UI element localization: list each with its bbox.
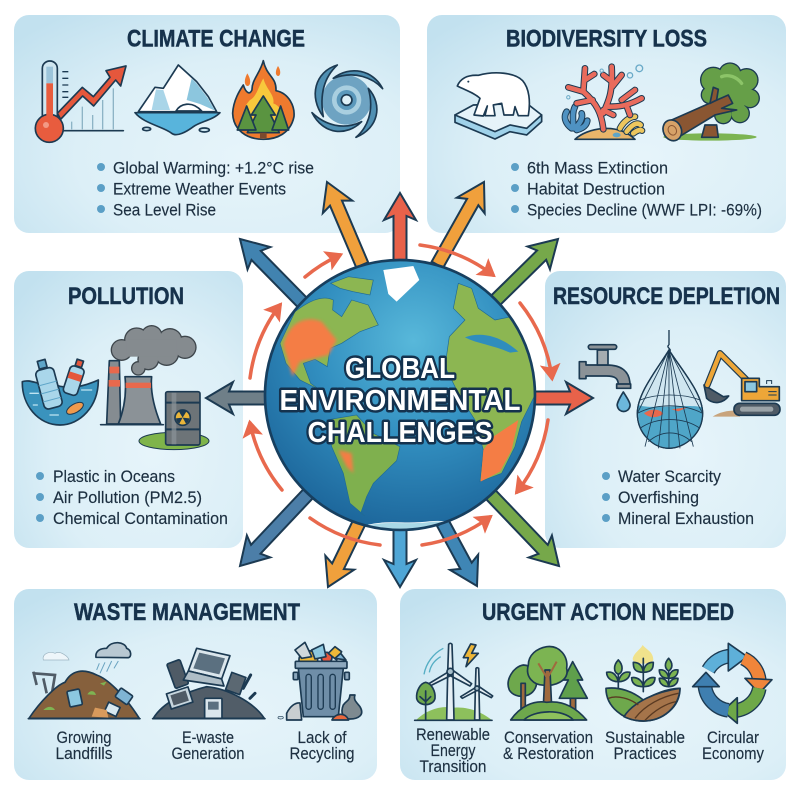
bullet list: pollution: Chemical Contamination (53, 509, 228, 528)
label: conservation and restoration: Conservation (504, 728, 593, 747)
label: sustainable practices: Sustainable (605, 728, 685, 747)
landmass: greenland (383, 266, 419, 302)
icon: overflowing trash can (278, 642, 362, 720)
landmass: arctic islands (331, 277, 373, 295)
label: circular economy: Circular (707, 728, 759, 747)
heading: urgent action needed: URGENT ACTION NEEDED (482, 599, 734, 626)
icon: melting iceberg (135, 65, 220, 135)
icon: trees and restoration (508, 647, 587, 720)
panel: biodiversity loss (427, 15, 786, 233)
label: e-waste generation: Generation (172, 744, 244, 763)
ice: antarctica (368, 520, 444, 529)
icon: e-waste pile (153, 648, 265, 719)
panel: waste management (14, 589, 377, 780)
panel: urgent action needed (400, 589, 786, 780)
icon: circular economy (693, 643, 772, 723)
icon: wind turbines (415, 643, 493, 720)
icon: polar bear on ice floe (455, 73, 542, 139)
icon: thermometer with rising chart (35, 61, 126, 142)
icon: factory with smoke (101, 325, 197, 425)
icon: dripping faucet (579, 345, 631, 411)
heading: climate change: CLIMATE CHANGE (127, 26, 305, 52)
label: renewable energy transition: Renewable (416, 725, 490, 744)
circular arrows around globe (250, 245, 552, 545)
panel: pollution (14, 271, 243, 548)
panel: resource depletion (545, 271, 786, 548)
heading: waste management: WASTE MANAGEMENT (74, 599, 300, 626)
title: CHALLENGES (308, 417, 492, 449)
icon: growing landfill (28, 643, 140, 719)
icon: hurricane (312, 65, 383, 137)
globe (265, 260, 537, 537)
icon: wildfire (233, 61, 294, 139)
title: GLOBAL (345, 353, 455, 385)
icon: fishing net (637, 330, 703, 448)
bullet list: biodiversity loss: Species Decline (WWF LPI: -69%) (527, 200, 762, 220)
icon: toxic barrel (139, 392, 209, 450)
heat zone: north america (283, 319, 337, 377)
bullet list: climate change: Sea Level Rise (113, 200, 216, 220)
bullet list: climate change: Extreme Weather Events (113, 180, 286, 198)
heat zone: africa (481, 420, 518, 482)
bullet list: biodiversity loss: Habitat Destruction (527, 180, 665, 198)
radiating arrows (206, 174, 593, 594)
icon: excavator (704, 353, 780, 417)
panel: climate change (14, 15, 400, 233)
bullet list: pollution: Plastic in Oceans (53, 467, 175, 486)
label: conservation and restoration: & Restoration (503, 744, 594, 763)
bullet list: pollution: Air Pollution (PM2.5) (53, 488, 202, 507)
bullet list: pollution (36, 467, 228, 528)
icon: plastic in ocean (22, 358, 98, 425)
label: sustainable practices: Practices (614, 744, 676, 763)
bullet list: resource depletion: Mineral Exhaustion (618, 509, 754, 528)
title: ENVIRONMENTAL (280, 385, 520, 417)
label: growing landfills: Landfills (56, 744, 112, 763)
label: renewable energy transition: Transition (420, 757, 486, 776)
label: e-waste generation: E-waste (182, 728, 234, 747)
landmass: europe and africa (445, 283, 537, 482)
icon: coral reef (565, 65, 643, 139)
bullet list: biodiversity loss (511, 158, 762, 220)
label: growing landfills: Growing (56, 728, 112, 747)
label: lack of recycling: Recycling (290, 744, 354, 763)
bullet list: resource depletion (602, 467, 754, 528)
sea: mediterranean (465, 335, 518, 353)
icon: felled tree (660, 62, 760, 144)
heat zone: south america (338, 450, 353, 473)
icon: sustainable farming (606, 645, 680, 721)
label: renewable energy transition: Energy (430, 741, 476, 760)
heading: biodiversity loss: BIODIVERSITY LOSS (506, 26, 707, 52)
bullet list: resource depletion: Overfishing (618, 488, 699, 507)
bullet list: resource depletion: Water Scarcity (618, 467, 721, 486)
label: lack of recycling: Lack of (298, 728, 347, 747)
landmass: north america (280, 298, 378, 390)
label: circular economy: Economy (702, 744, 764, 763)
landmass: south america (327, 415, 400, 516)
bullet list: biodiversity loss: 6th Mass Extinction (527, 158, 668, 178)
bullet list: climate change (97, 158, 314, 220)
heading: pollution: POLLUTION (68, 283, 184, 310)
bullet list: climate change: Global Warming: +1.2°C rise (113, 158, 314, 178)
